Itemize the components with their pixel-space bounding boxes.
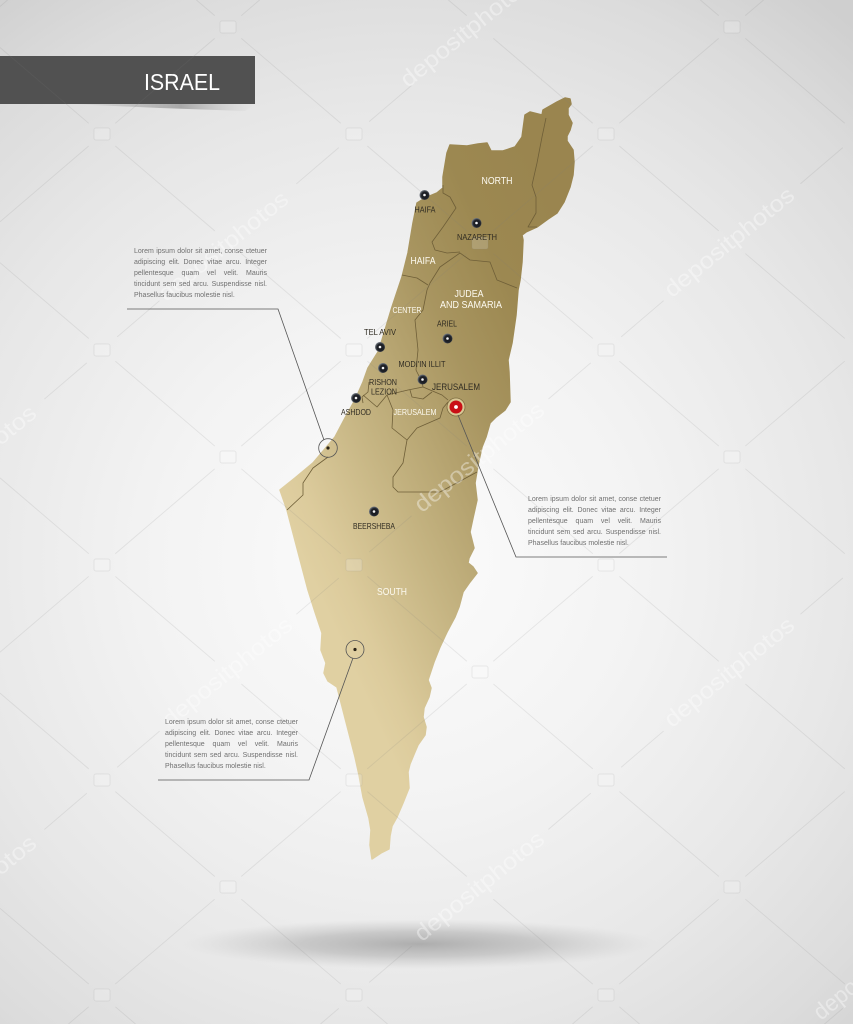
callout text 3: Lorem ipsum dolor sit amet, conse ctetuer [165,719,298,726]
city labels: BEERSHEBA [353,521,395,531]
callout text 2: adipiscing elit. Donec vitae arcu. Integer [528,507,661,514]
callout 3 connector and marker [158,640,364,780]
region labels: SOUTH [377,587,407,598]
callout text 2: Lorem ipsum dolor sit amet, conse ctetuer [528,496,661,503]
city labels: ARIEL [437,318,457,328]
city labels: TEL AVIV [364,327,396,337]
city labels [341,204,497,531]
callout text 2 [528,496,661,547]
city labels: JERUSALEM [432,382,480,393]
region labels: JERUSALEM [394,407,436,417]
city labels: MODI'IN ILLIT [398,359,446,369]
callout text 3: tincidunt sem sed arcu. Suspendisse nisl. [165,752,298,759]
watermark lattice: depositphotos [659,611,799,732]
title: ISRAEL [144,69,220,95]
watermark lattice: depositphotos [409,825,549,946]
region labels: NORTH [482,176,512,187]
title banner [0,56,255,104]
city labels: RISHON [369,377,397,387]
map of Israel [280,98,574,859]
callout text 1: tincidunt sem sed arcu. Suspendisse nisl. [134,281,267,288]
region labels: AND SAMARIA [440,300,502,311]
callout text 1: adipiscing elit. Donec vitae arcu. Integer [134,259,267,266]
callout text 1: pellentesque quam vel velit. Mauris [134,270,267,277]
callout 2 connector [458,415,667,557]
city labels: ASHDOD [341,407,371,417]
region labels [377,176,512,598]
region borders [287,118,546,510]
city labels: NAZARETH [457,232,497,242]
callout text 1: Lorem ipsum dolor sit amet, conse ctetuer [134,248,267,255]
map silhouette [280,98,574,859]
region labels: HAIFA [410,256,436,267]
capital pin: Jerusalem [447,398,465,416]
callout text 1 [134,248,267,299]
callout text 3: Phasellus faucibus molestie nisl. [165,763,266,770]
title banner shadow [70,104,255,111]
watermark lattice: depositphotos [153,185,293,306]
callout text 1: Phasellus faucibus molestie nisl. [134,292,235,299]
callout 1 connector and marker [127,309,337,457]
watermark lattice: depositphotos [659,181,799,302]
city labels: HAIFA [414,204,436,214]
callout text 3: adipiscing elit. Donec vitae arcu. Integer [165,730,298,737]
callout text 3 [165,718,298,770]
city labels: LEZION [371,386,397,396]
callout text 2: tincidunt sem sed arcu. Suspendisse nisl. [528,529,661,536]
city pins [351,190,482,516]
callout text 2: pellentesque quam vel velit. Mauris [528,518,661,525]
callout text 3: pellentesque quam vel velit. Mauris [165,741,298,748]
region labels: CENTER [392,305,422,315]
watermark lattice: depositphotos [157,611,297,732]
watermark lattice: depositphotos [409,396,549,517]
region labels: JUDEA [454,289,484,300]
ground shadow [182,919,658,969]
callout text 2: Phasellus faucibus molestie nisl. [528,540,629,547]
